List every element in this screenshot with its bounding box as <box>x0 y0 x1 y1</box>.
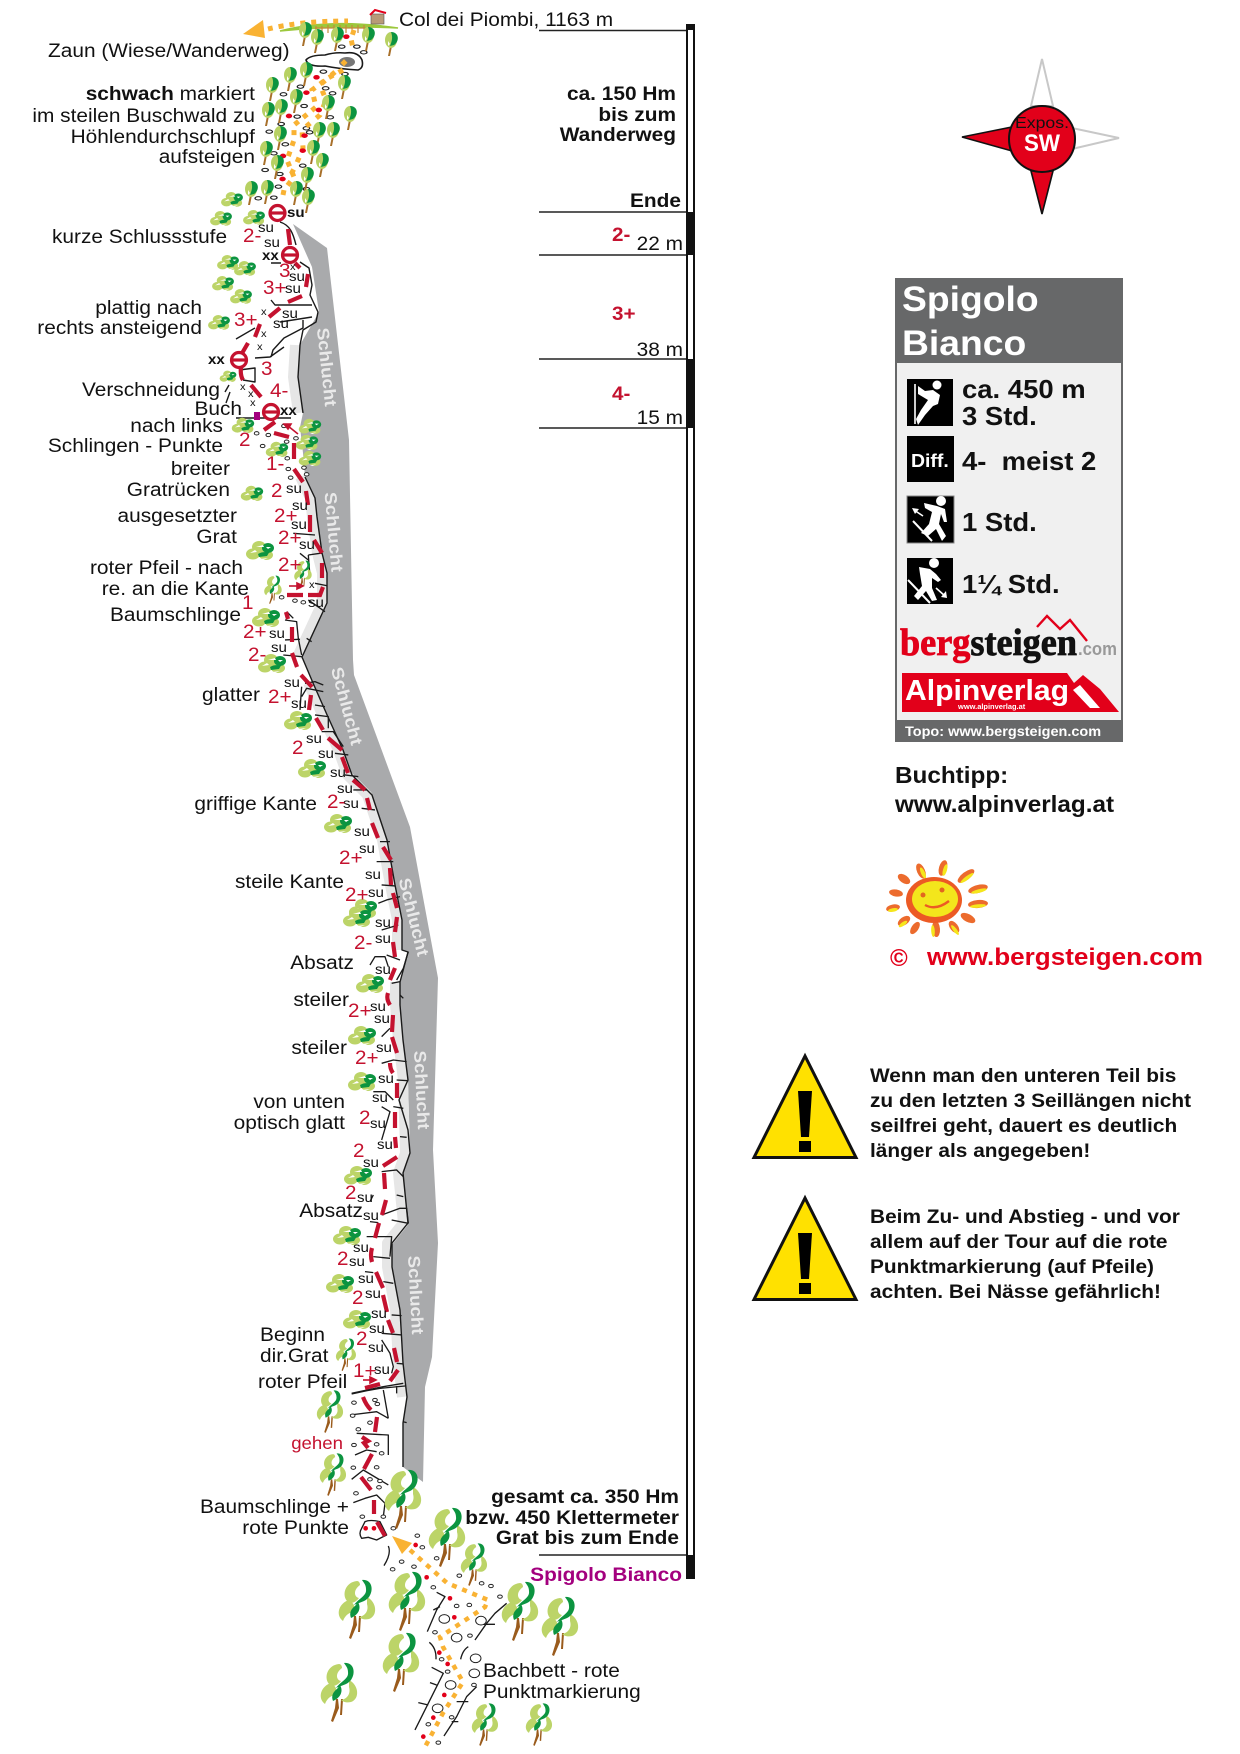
route annotations left: aufsteigen <box>159 147 255 168</box>
warning text 1 <box>870 1066 1191 1162</box>
protection labels su x xx: su <box>369 1321 385 1337</box>
height scale: Grat bis zum Ende <box>496 1528 679 1549</box>
icon: orange path and arrow at summit <box>243 20 348 38</box>
route annotations left: steiler <box>291 1038 347 1059</box>
height scale: 22 m <box>637 234 683 255</box>
panel: gully shading Schlucht <box>293 224 438 1482</box>
key facts: 1¼ Std. <box>962 570 1060 599</box>
difficulty grades: 2+ <box>339 848 363 869</box>
route annotations left: Zaun (Wiese/Wanderweg) <box>48 41 290 62</box>
route annotations left: optisch glatt <box>234 1113 345 1134</box>
protection labels su x xx: su <box>291 517 307 533</box>
difficulty grades: 3+ <box>263 278 287 299</box>
difficulty grades: 1 <box>242 593 253 614</box>
route annotations left: Punktmarkierung <box>483 1682 641 1703</box>
difficulty grades: 2 <box>356 1329 367 1350</box>
website copyright: © <box>890 945 908 972</box>
route annotations left: Baumschlinge <box>110 605 241 626</box>
difficulty grades: 2 <box>239 430 250 451</box>
icon: exposure compass: Expos. <box>1015 115 1069 132</box>
height scale: gesamt ca. 350 Hm <box>491 1487 679 1508</box>
height scale: bzw. 450 Klettermeter <box>465 1508 679 1529</box>
route annotations left: roter Pfeil - nach <box>90 558 243 579</box>
protection labels su x xx <box>208 205 394 1378</box>
icon: belay stations <box>232 206 298 420</box>
protection labels su x xx: su <box>308 595 324 611</box>
heading: Bianco <box>902 323 1026 363</box>
Schlucht labels: Schlucht <box>327 665 366 748</box>
difficulty grades: 3+ <box>234 310 258 331</box>
protection labels su x xx: su <box>368 885 384 901</box>
summit label: Col dei Piombi, 1163 m <box>399 10 613 31</box>
difficulty grades <box>234 226 379 1382</box>
book tip: www.alpinverlag.at <box>894 792 1114 817</box>
gravel pebbles <box>254 45 502 1744</box>
route annotations left: Buch <box>194 399 242 420</box>
protection labels su x xx: su <box>292 498 308 514</box>
protection labels su x xx: su <box>285 281 301 297</box>
protection labels su x xx: xx <box>262 248 280 264</box>
key facts: 3 Std. <box>962 402 1037 431</box>
difficulty grades: 2+ <box>348 1001 372 1022</box>
warning text 2: Beim Zu- und Abstieg - und vor <box>870 1207 1180 1228</box>
protection labels su x xx: su <box>363 1155 379 1171</box>
trees lower slope <box>264 561 578 1746</box>
icon: sun logo <box>885 859 989 937</box>
protection labels su x xx: su <box>330 765 346 781</box>
difficulty grades: 3 <box>261 359 272 380</box>
difficulty grades: 2 <box>337 1249 348 1270</box>
protection labels su x xx: x <box>257 341 263 353</box>
difficulty grades: 2+ <box>278 555 302 576</box>
protection labels su x xx: su <box>375 931 391 947</box>
difficulty grades: 2- <box>248 645 266 666</box>
route annotations left: ausgesetzter <box>118 506 237 527</box>
route annotations left: im steilen Buschwald zu <box>32 106 255 127</box>
route annotations left: rechts ansteigend <box>37 318 202 339</box>
icon: red direction arrows <box>284 424 376 1383</box>
key facts <box>962 375 1096 599</box>
difficulty grades: 2+ <box>268 687 292 708</box>
book tip: Buchtipp: <box>895 763 1008 788</box>
protection labels su x xx: su <box>376 1040 392 1056</box>
footer credit: Topo: www.bergsteigen.com <box>905 723 1101 739</box>
rock face outline <box>225 222 507 1736</box>
protection labels su x xx: su <box>378 1071 394 1087</box>
route annotations left: Absatz <box>290 953 354 974</box>
panel: route summary <box>895 278 1123 742</box>
difficulty grades: 2- <box>327 792 345 813</box>
Schlucht labels <box>313 327 433 1335</box>
protection labels su x xx: su <box>377 1137 393 1153</box>
key facts: 1 Std. <box>962 508 1037 537</box>
route annotations left: nach links <box>130 416 223 437</box>
icon: exposure compass <box>962 59 1119 214</box>
protection labels su x xx: x <box>250 397 256 409</box>
protection labels su x xx: su <box>291 696 307 712</box>
difficulty grades: 2 <box>292 738 303 759</box>
icon: warning triangle 2 <box>754 1198 856 1300</box>
route annotations left: breiter <box>171 459 230 480</box>
difficulty grades: 2+ <box>274 506 298 527</box>
warning text 2: Punktmarkierung (auf Pfeile) <box>870 1257 1154 1278</box>
warning text 2 <box>870 1207 1180 1303</box>
icon: difficulty: Diff. <box>911 451 949 472</box>
height scale: ca. 150 Hm <box>567 84 676 105</box>
protection labels su x xx: x <box>261 328 267 340</box>
protection labels su x xx: su <box>353 1240 369 1256</box>
protection labels su x xx: su <box>354 824 370 840</box>
height scale: Spigolo Bianco <box>530 1565 682 1586</box>
protection labels su x xx: su <box>264 235 280 251</box>
route annotations left: Absatz <box>299 1201 363 1222</box>
route annotations left: Verschneidung <box>82 380 220 401</box>
route annotations left: gehen <box>291 1434 343 1453</box>
Schlucht labels: Schlucht <box>313 327 340 408</box>
difficulty grades: 2+ <box>345 885 369 906</box>
icon: warning triangle 1 <box>754 1056 856 1158</box>
protection labels su x xx: su <box>269 626 285 642</box>
logo: Alpinverlag <box>902 673 1119 712</box>
protection labels su x xx: su <box>359 841 375 857</box>
difficulty grades: 1- <box>266 454 284 475</box>
route annotations left <box>32 41 641 1703</box>
protection labels su x xx: su <box>286 481 302 497</box>
height scale: 2- <box>612 225 630 246</box>
warning text 1: länger als angegeben! <box>870 1141 1090 1162</box>
Schlucht labels: Schlucht <box>404 1255 427 1335</box>
route annotations left: Schlingen - Punkte <box>48 436 223 457</box>
protection labels su x xx: su <box>370 999 386 1015</box>
heading: Spigolo <box>902 279 1039 319</box>
logo: Alpinverlag: www.alpinverlag.at <box>957 702 1026 711</box>
logo: Alpinverlag: Alpinverlag <box>905 676 1069 707</box>
route annotations left: dir.Grat <box>260 1346 329 1367</box>
protection labels su x xx: su <box>271 640 287 656</box>
protection labels su x xx: x <box>248 388 254 400</box>
route annotations left: steile Kante <box>235 872 344 893</box>
protection labels su x xx: su <box>289 269 305 285</box>
Schlucht labels: Schlucht <box>410 1050 433 1130</box>
height scale: 4- <box>612 384 630 405</box>
protection labels su x xx: su <box>349 1254 365 1270</box>
route annotations left: Baumschlinge + <box>200 1497 349 1518</box>
height scale: Ende <box>630 191 681 212</box>
warning text 1: seilfrei geht, dauert es deutlich <box>870 1116 1177 1137</box>
book tip <box>894 763 1114 817</box>
height scale: Wanderweg <box>560 125 676 146</box>
difficulty grades: 2- <box>243 226 261 247</box>
protection labels su x xx: su <box>318 746 334 762</box>
route annotations left: griffige Kante <box>194 794 317 815</box>
protection labels su x xx: su <box>287 205 305 221</box>
route annotations left: Grat <box>196 527 237 548</box>
icon: climber <box>907 379 953 426</box>
route annotations left: Gratrücken <box>127 480 230 501</box>
route annotations left: glatter <box>202 685 260 706</box>
key facts: 4- meist 2 <box>962 447 1096 476</box>
difficulty grades: 3 <box>279 261 290 282</box>
route annotations left: steiler <box>293 990 349 1011</box>
difficulty grades: 2 <box>345 1183 356 1204</box>
protection labels su x xx: su <box>365 867 381 883</box>
protection labels su x xx: su <box>365 1286 381 1302</box>
icon: exposure compass: SW <box>1024 130 1060 157</box>
website copyright: www.bergsteigen.com <box>926 944 1203 971</box>
protection labels su x xx: xx <box>208 352 226 368</box>
warning text 2: achten. Bei Nässe gefährlich! <box>870 1282 1161 1303</box>
protection labels su x xx: x <box>290 261 296 273</box>
icon: cave passage <box>306 53 362 70</box>
route annotations left: rote Punkte <box>242 1518 349 1539</box>
height scale: 38 m <box>637 340 683 361</box>
route annotations left: kurze Schlussstufe <box>52 227 227 248</box>
climbing route dashed line <box>241 229 398 1536</box>
difficulty grades: 4- <box>270 381 288 402</box>
protection labels su x xx: su <box>337 781 353 797</box>
protection labels su x xx: su <box>358 1271 374 1287</box>
icon: descent hiker <box>907 558 953 604</box>
protection labels su x xx: su <box>299 537 315 553</box>
protection labels su x xx: su <box>282 306 298 322</box>
route annotations left: re. an die Kante <box>102 579 249 600</box>
approach path dots upper <box>279 30 354 200</box>
Schlucht labels: Schlucht <box>321 491 346 573</box>
protection labels su x xx: su <box>284 675 300 691</box>
warning text 1: Wenn man den unteren Teil bis <box>870 1066 1176 1087</box>
protection labels su x xx: su <box>375 915 391 931</box>
route annotations left: plattig nach <box>95 298 202 319</box>
Schlucht labels: Schlucht <box>395 876 432 959</box>
protection labels su x xx: x <box>309 579 315 591</box>
route annotations left: Höhlendurchschlupf <box>71 127 255 148</box>
difficulty grades: 2 <box>353 1141 364 1162</box>
logo: bergsteigen.com: .com <box>1078 639 1117 659</box>
protection labels su x xx: su <box>372 1090 388 1106</box>
protection labels su x xx: xx <box>280 403 298 419</box>
route annotations left: schwach markiert <box>86 84 255 105</box>
protection labels su x xx: su <box>374 1362 390 1378</box>
difficulty grades: 2 <box>271 481 282 502</box>
protection labels su x xx: x <box>240 381 246 393</box>
difficulty grades: 1+ <box>353 1361 377 1382</box>
protection labels su x xx: su <box>258 220 274 236</box>
route annotations left: Bachbett - rote <box>483 1661 620 1682</box>
difficulty grades: 2- <box>354 933 372 954</box>
protection labels su x xx: su <box>306 731 322 747</box>
difficulty grades: 2 <box>352 1288 363 1309</box>
difficulty grades: 2+ <box>278 528 302 549</box>
icon: ascent hiker <box>907 496 954 543</box>
route annotations left: von unten <box>253 1092 345 1113</box>
warning text 1: zu den letzten 3 Seillängen nicht <box>870 1091 1191 1112</box>
protection labels su x xx: su <box>357 1190 373 1206</box>
height scale <box>465 24 695 1586</box>
icon: meadow, fence and hut at Col dei Piombi <box>280 10 398 33</box>
lower approach path with arrow <box>363 1526 488 1747</box>
warning text 2: allem auf der Tour auf die rote <box>870 1232 1168 1253</box>
height scale: bis zum <box>598 105 676 126</box>
protection labels su x xx: x <box>261 306 267 318</box>
height scale: 15 m <box>637 408 683 429</box>
protection labels su x xx: su <box>375 962 391 978</box>
bushes along the route <box>208 192 384 1329</box>
protection labels su x xx: su <box>368 1340 384 1356</box>
key facts: ca. 450 m <box>962 375 1086 404</box>
logo: bergsteigen.com: bergsteigen <box>900 622 1077 664</box>
protection labels su x xx: su <box>273 316 289 332</box>
protection labels su x xx: su <box>371 1306 387 1322</box>
protection labels su x xx: su <box>370 1116 386 1132</box>
difficulty grades: 2+ <box>355 1048 379 1069</box>
icon: summit book <box>254 412 260 420</box>
protection labels su x xx: su <box>374 1011 390 1027</box>
route annotations left: roter Pfeil <box>258 1372 347 1393</box>
route annotations left: Beginn <box>260 1325 325 1346</box>
height scale: 3+ <box>612 304 636 325</box>
difficulty grades: 2 <box>359 1108 370 1129</box>
icon: difficulty <box>907 436 954 482</box>
protection labels su x xx: su <box>363 1208 379 1224</box>
heading <box>902 279 1039 363</box>
small trees upper forest <box>245 22 398 213</box>
protection labels su x xx: su <box>343 796 359 812</box>
difficulty grades: 2+ <box>243 622 267 643</box>
